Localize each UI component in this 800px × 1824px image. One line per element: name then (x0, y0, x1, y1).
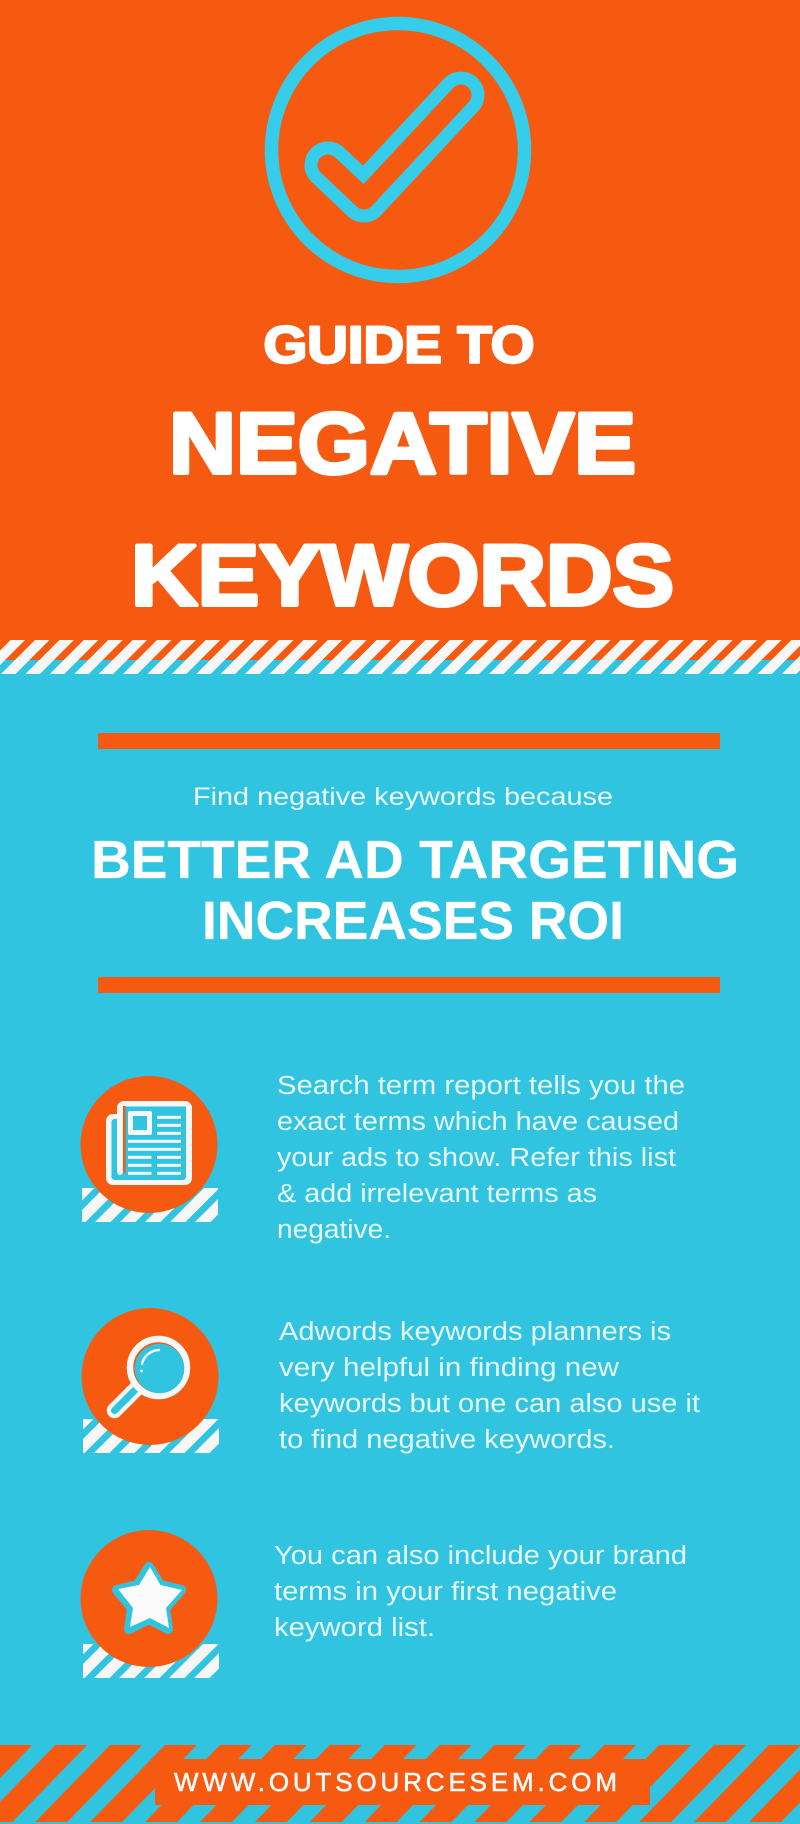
panel: keyword planner item (82, 1308, 700, 1454)
panel: orange header (0, 0, 800, 660)
footer url: WWW.OUTSOURCESEM.COM (174, 1767, 617, 1797)
subtitle: Find negative keywords because (193, 784, 613, 811)
stripes under icon 2 (83, 1419, 219, 1453)
footer band (0, 1745, 800, 1822)
stripes under icon 3 (83, 1644, 219, 1678)
icon: check mark in circle (272, 24, 524, 276)
icon: star (80, 1530, 218, 1667)
divider bar top (98, 733, 720, 749)
text block: brand terms: terms in your first negative (274, 1578, 617, 1606)
text block: search term report (277, 1072, 685, 1244)
diagonal stripe band (0, 640, 800, 674)
text block: search term report: Search term report tells you the (277, 1072, 685, 1100)
heading: better ad targeting increases roi: INCREASES ROI (202, 891, 624, 951)
text block: search term report: negative. (277, 1216, 391, 1244)
text block: keyword planner (279, 1318, 700, 1454)
stripes under icon 1 (82, 1188, 218, 1222)
text block: keyword planner: Adwords keywords planners is (279, 1318, 671, 1346)
text block: search term report: exact terms which have caused (277, 1108, 679, 1136)
heading: negative: NEGATIVE (169, 396, 636, 492)
text block: search term report: your ads to show. Refer this list (277, 1144, 676, 1172)
divider bar bottom (98, 977, 720, 993)
text block: brand terms (274, 1542, 687, 1642)
text block: brand terms: You can also include your brand (274, 1542, 687, 1570)
heading: better ad targeting increases roi (91, 830, 739, 951)
text block: keyword planner: to find negative keywords. (279, 1426, 615, 1454)
heading: guide to: GUIDE TO (264, 316, 534, 374)
text block: search term report: & add irrelevant terms as (277, 1180, 597, 1208)
text block: keyword planner: very helpful in finding new (279, 1354, 620, 1382)
panel: brand terms item (80, 1530, 687, 1678)
heading: keywords: KEYWORDS (131, 528, 674, 624)
panel: search term report item (80, 1072, 685, 1244)
icon: newspaper (80, 1076, 218, 1213)
icon: magnifying glass (82, 1308, 218, 1445)
heading: better ad targeting increases roi: BETTER AD TARGETING (91, 830, 739, 890)
text block: brand terms: keyword list. (274, 1614, 435, 1642)
text block: keyword planner: keywords but one can also use it (279, 1390, 700, 1418)
